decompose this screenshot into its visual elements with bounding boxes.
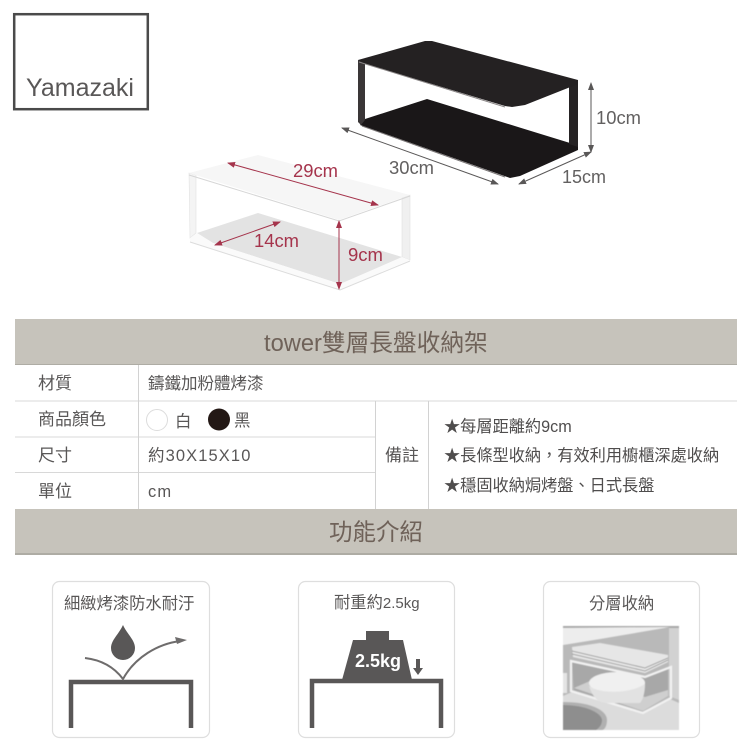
feature card: load capacity [298,582,454,738]
black shelf product [358,41,578,178]
logo: Yamazaki: Yamazaki [26,74,134,102]
feature card: waterproof coating [52,582,210,738]
logo: Yamazaki [14,14,148,109]
dimension: 9cm [339,221,383,289]
icon: water drop bouncing off table [71,625,191,728]
row: unit: 單位 [38,482,72,501]
row: colour [38,408,250,431]
heading band: features: 功能介紹 [329,519,423,545]
heading band: features [15,509,737,555]
dimension: 9cm: 9cm [348,245,383,265]
feature card: load capacity: 耐重約2.5kg [334,594,420,612]
photo: shelf holding dishes [563,626,679,730]
heading band: product name [15,319,737,365]
icon: 2.5kg weight on table: 2.5kg [355,651,401,671]
dimension: 15cm [519,152,606,187]
row: colour: 商品顏色 [38,410,106,429]
row: size [38,446,251,465]
dimension: 29cm [228,161,378,205]
white shelf product [189,155,410,290]
row: unit [38,482,172,501]
notes list: ★每層距離約9cm [444,418,572,436]
dimension: 30cm: 30cm [389,158,434,178]
row: size: 尺寸 [38,446,72,465]
notes list: ★長條型收納，有效利用櫥櫃深處收納 [444,447,719,465]
dimension: 14cm [215,222,299,251]
row: colour: 白 [175,412,192,431]
feature card: layered storage [544,582,700,738]
dimension: 29cm: 29cm [293,161,338,181]
dimension: 15cm: 15cm [562,167,606,187]
dimension: 10cm: 10cm [596,108,641,128]
dimension: 10cm [591,83,641,152]
feature card: layered storage: 分層收納 [589,595,654,613]
notes list: ★穩固收納焗烤盤、日式長盤 [444,477,654,495]
row: material: 鑄鐵加粉體烤漆 [148,374,264,393]
notes label: 備註 [385,446,419,465]
row: unit: cm [148,483,172,501]
row: size: 約30X15X10 [148,446,251,465]
feature card: waterproof coating: 細緻烤漆防水耐汙 [64,595,194,613]
notes list [444,418,719,495]
row: colour: 黑 [234,411,250,430]
row: material: 材質 [38,374,72,393]
dimension: 30cm [342,128,498,184]
row: material [38,374,264,393]
icon: 2.5kg weight on table [312,631,441,728]
heading band: product name: tower雙層長盤收納架 [264,330,488,357]
spec table [15,365,737,509]
dimension: 14cm: 14cm [254,231,299,251]
